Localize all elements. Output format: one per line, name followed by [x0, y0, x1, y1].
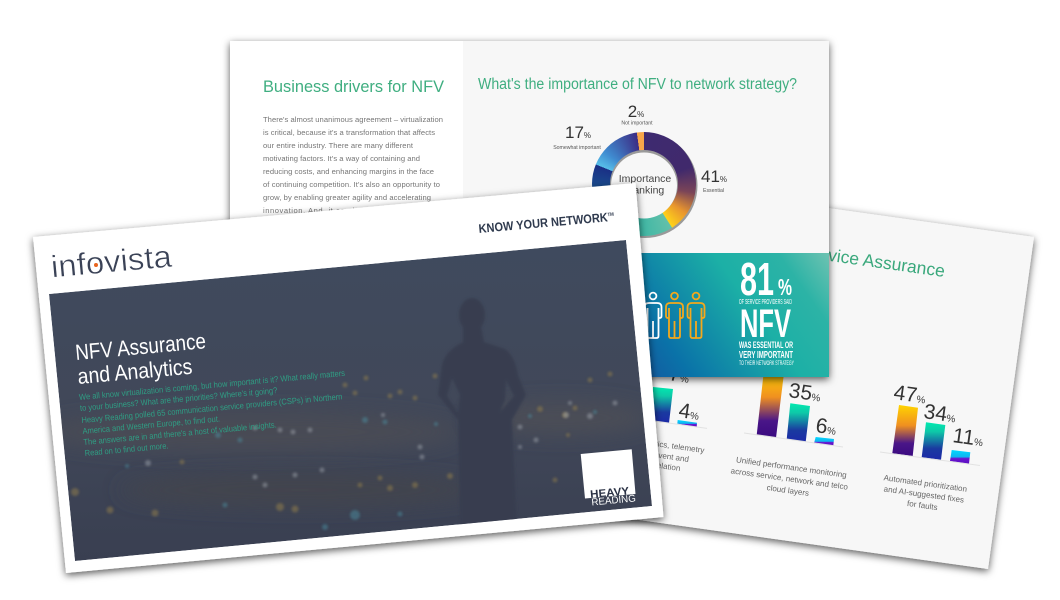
caption: group one — [635, 436, 705, 473]
caption: unified performance: Unified performance monitoring — [735, 455, 847, 480]
label: 41% essential: Essential — [703, 188, 724, 194]
text block: intro paragraph: motivating factors. It's a way of containing and — [263, 154, 420, 163]
heading: service assurance: Service Assurance — [800, 241, 946, 281]
label: 17% somewhat important: 17% — [565, 123, 591, 142]
title: NFV assurance and analytics: NFV Assurance — [74, 328, 207, 365]
text block: 81% statistic: TO THEIR NETWORK STRATEGY — [739, 361, 794, 367]
icon: white person — [644, 293, 662, 338]
chart: automated prioritization bars: 11% — [951, 424, 985, 451]
text block: 81% statistic: OF SERVICE PROVIDERS SAID — [739, 299, 792, 306]
text block: cover introduction: Heavy Reading polled 65 communication service providers (CSPs) in Northern — [81, 391, 343, 425]
caption: group one: Analytics, telemetry — [635, 436, 705, 455]
chart: group one bars — [640, 362, 707, 428]
text block: 81% statistic — [739, 253, 794, 367]
text block: 81% statistic: VERY IMPORTANT — [739, 350, 793, 361]
text block: cover introduction: The answers are in and there's a host of valuable insights. — [83, 419, 277, 447]
title: NFV assurance and analytics — [74, 328, 207, 389]
text block: intro paragraph — [263, 115, 443, 215]
logo: infovista: infovista — [49, 239, 174, 284]
text block: cover introduction: America and Western Europe, to find out. — [82, 414, 220, 436]
panel: business drivers page (middle) — [230, 41, 829, 377]
caption: unified performance: cloud layers — [766, 483, 810, 498]
text block: intro paragraph: of continuing competition. It's also an opportunity to — [263, 180, 440, 189]
chart: automated prioritization bars: 47% — [892, 381, 928, 408]
caption: group one: correlation — [643, 459, 681, 473]
text block: 81% statistic: 81 — [740, 253, 774, 305]
caption: automated prioritization: for faults — [907, 499, 938, 512]
icon: orange person — [666, 293, 683, 338]
chart: automated prioritization bars — [880, 381, 985, 466]
text block: 81% statistic: % — [778, 274, 792, 300]
tagline: know your network: KNOW YOUR NETWORK — [478, 209, 626, 236]
text block: 81% statistic: NFV — [740, 302, 791, 346]
chart: importance donut — [592, 132, 698, 238]
caption: automated prioritization: and AI-suggested fixes — [883, 484, 965, 505]
chart: group one bars: 4% — [677, 399, 701, 425]
donut center label: Importance — [619, 173, 671, 185]
text block: intro paragraph: our entire industry. There are many different — [263, 141, 414, 150]
text block: cover introduction: Read on to find out more. — [84, 440, 169, 458]
donut center label: Ranking — [626, 184, 664, 196]
chart: unified performance bars — [744, 370, 843, 447]
caption: unified performance: across service, network and telco — [730, 466, 849, 492]
label: 17% somewhat important — [553, 123, 601, 151]
text block: cover introduction: to your business? What are the priorities? Where's it going? — [80, 385, 278, 413]
chart: unified performance bars: 35% — [787, 379, 823, 406]
caption: automated prioritization — [883, 473, 968, 512]
donut center label — [619, 173, 671, 196]
label: 2% not important: 2% — [628, 102, 644, 121]
text block: intro paragraph: grow, by enabling greater agility and accelerating — [263, 193, 431, 202]
chart: unified performance bars: 6% — [814, 414, 838, 440]
heading: importance question: What's the importance of NFV to network strategy? — [478, 76, 797, 93]
logo: heavy reading: HEAVY — [590, 485, 630, 501]
panel: 81% banner — [463, 253, 829, 377]
chart: group one bars: 7% — [667, 362, 691, 388]
text block: cover introduction — [79, 368, 345, 458]
logo: heavy reading: READING — [591, 493, 637, 508]
text block: intro paragraph: There's almost unanimous agreement – virtualization — [263, 115, 443, 124]
label: 2% not important: Not important — [621, 120, 653, 126]
silhouette of a man — [438, 298, 526, 530]
label: 41% essential: 41% — [701, 167, 727, 186]
text block: intro paragraph: innovation. And, it can help you stay ahead. — [263, 206, 433, 215]
image: night city with silhouette — [40, 240, 652, 561]
panel: cover page (front) — [33, 183, 664, 573]
title: NFV assurance and analytics: and Analytics — [76, 354, 193, 389]
logo: heavy reading — [581, 449, 637, 508]
panel: service assurance page (back) — [394, 154, 1034, 569]
label: 17% somewhat important: Somewhat important — [553, 145, 601, 151]
caption: unified performance — [730, 455, 849, 498]
text block: intro paragraph: is critical, because it's a transformation that affects — [263, 128, 435, 137]
icon: orange person — [688, 293, 704, 338]
text block: cover introduction: We all know virtualization is coming, but how important is it? What really matters — [79, 368, 345, 402]
caption: group one: event and — [653, 450, 689, 464]
label: 2% not important — [621, 102, 653, 126]
tagline: know your network: TM — [607, 212, 614, 218]
caption: automated prioritization: Automated prioritization — [883, 473, 968, 494]
chart: automated prioritization bars: 34% — [922, 400, 958, 427]
text block: 81% statistic: WAS ESSENTIAL OR — [739, 340, 793, 351]
heading: business drivers: Business drivers for NFV — [263, 77, 445, 96]
text block: intro paragraph: reducing costs, and enhancing margins in the face — [263, 167, 434, 176]
